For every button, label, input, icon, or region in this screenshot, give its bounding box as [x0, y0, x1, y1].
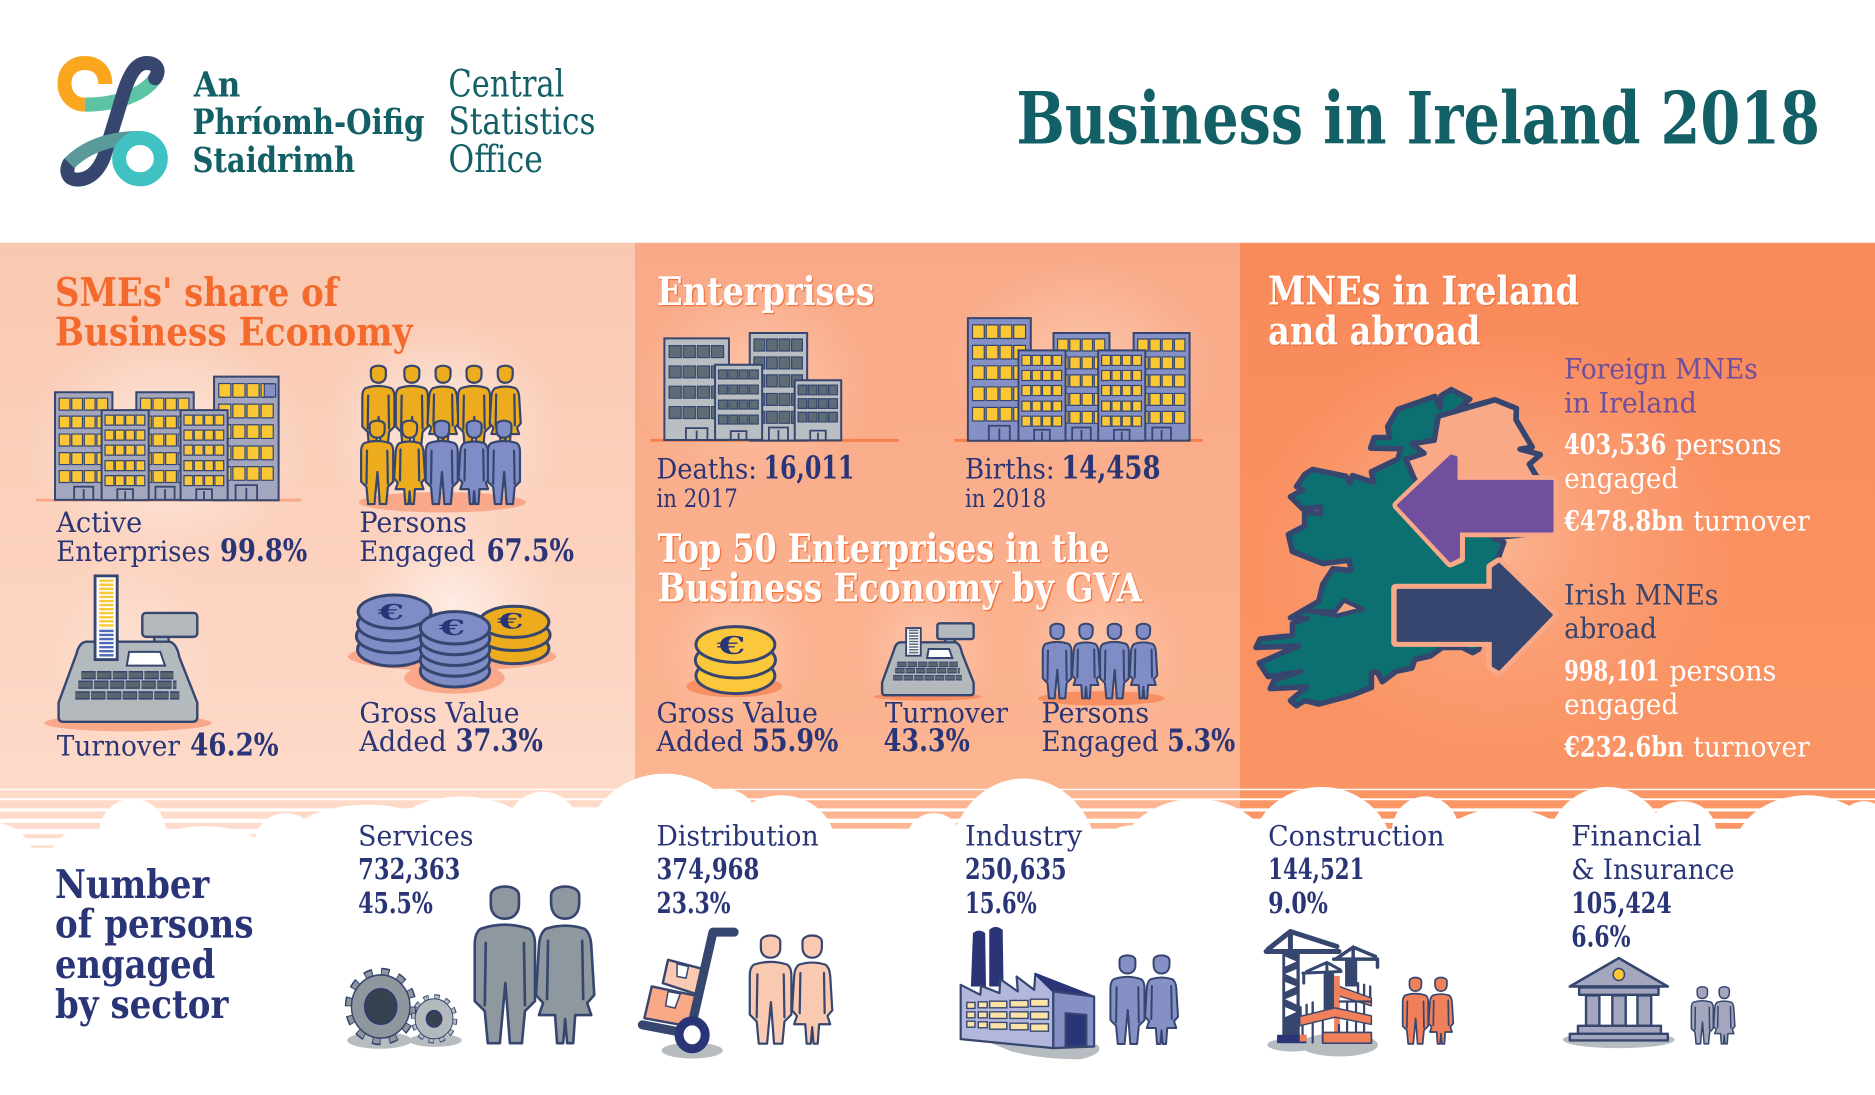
heading: number of persons engaged by sector	[55, 862, 254, 1028]
sector: financial and insurance	[1563, 819, 1735, 1048]
text: Irish MNEs	[1563, 578, 1810, 763]
icon: factory	[961, 927, 1099, 1059]
label: persons engaged share: Engaged	[1042, 725, 1159, 758]
sector: construction	[1266, 819, 1453, 1056]
icon: two persons blue	[1110, 955, 1178, 1044]
sector: distribution	[642, 819, 832, 1058]
sector: services	[347, 819, 594, 1049]
label: GVA share: 55.9%	[752, 723, 838, 759]
arrow: Irish MNEs abroad	[1396, 562, 1554, 672]
heading: Business Economy	[55, 310, 413, 356]
label: gross value added: Added	[358, 725, 447, 758]
label: turnover: Turnover	[57, 730, 180, 763]
label: persons engaged share: 5.3%	[1167, 723, 1235, 759]
label: active enterprises: 99.8%	[220, 533, 307, 569]
text: Irish MNEs: turnover	[1693, 730, 1810, 763]
icon: bank building	[1563, 958, 1675, 1048]
label: persons engaged	[359, 506, 574, 569]
label: deaths: in 2017	[656, 484, 738, 513]
heading: SMEs' share of	[55, 270, 341, 316]
text	[1571, 819, 1735, 953]
label: births	[965, 449, 1161, 513]
arrow: foreign MNEs into Ireland	[1397, 454, 1554, 563]
heading: number of persons engaged by sector: engaged	[55, 942, 215, 988]
text: 105,424	[1571, 886, 1672, 920]
map: Northern Ireland	[1406, 400, 1541, 516]
text: 45.5%	[358, 886, 433, 920]
text: Irish MNEs: persons	[1669, 654, 1776, 687]
label: persons engaged share: Persons	[1042, 696, 1149, 729]
heading: MNEs in Ireland	[1268, 268, 1579, 314]
text: Irish MNEs: abroad	[1564, 612, 1657, 645]
text: foreign MNEs: €478.8bn	[1563, 504, 1684, 537]
heading: number of persons engaged by sector: Number	[55, 862, 210, 908]
label: turnover share: Turnover	[885, 696, 1009, 729]
icon: coin stacks: €	[376, 600, 404, 625]
icon: persons engaged group	[359, 366, 526, 512]
map of Ireland with arrows	[1256, 390, 1554, 706]
icon: two persons peach	[750, 936, 832, 1044]
heading: top 50 enterprises	[658, 526, 1143, 611]
organisation name in English: Office	[448, 138, 543, 181]
label: births: in 2018	[965, 484, 1046, 513]
organisation name in Irish: An	[193, 64, 240, 105]
label: turnover share: 43.3%	[884, 723, 970, 759]
header: logo and title	[64, 62, 1820, 181]
text	[656, 819, 819, 920]
text: Distribution	[656, 819, 819, 852]
text	[965, 819, 1082, 920]
organisation name in Irish: Phríomh-Oifig	[193, 102, 425, 143]
heading: number of persons engaged by sector: by sector	[55, 982, 229, 1028]
label: deaths: Deaths:	[656, 452, 757, 485]
label: persons engaged: Persons	[359, 506, 467, 539]
text: 6.6%	[1571, 919, 1631, 953]
text: Irish MNEs: 998,101	[1564, 654, 1660, 687]
text: foreign MNEs: engaged	[1564, 462, 1678, 495]
icon: four persons	[1038, 624, 1165, 706]
heading: top 50 enterprises: Business Economy by GVA	[658, 565, 1143, 611]
label: active enterprises: Enterprises	[56, 535, 210, 568]
label: turnover: 46.2%	[190, 728, 279, 764]
label: persons engaged share	[1042, 696, 1235, 759]
label: turnover share	[884, 696, 1009, 759]
text: & Insurance	[1571, 853, 1735, 886]
icon: coin stacks	[348, 595, 556, 694]
text: foreign MNEs	[1563, 353, 1810, 537]
text: Irish MNEs: engaged	[1564, 688, 1678, 721]
sector: industry	[961, 819, 1178, 1059]
heading: and abroad	[1268, 308, 1480, 354]
icon: blue buildings (births)	[954, 318, 1203, 442]
label: GVA share: Gross Value	[656, 696, 818, 729]
organisation name in Irish: Staidrimh	[193, 140, 355, 181]
icon: yellow coin stack	[686, 627, 782, 697]
label: gross value added: 37.3%	[456, 723, 543, 759]
icon: two persons orange	[1403, 977, 1453, 1044]
label: GVA share: Added	[656, 725, 744, 758]
heading	[55, 270, 413, 356]
icon: two persons grey	[475, 887, 594, 1043]
label: births: 14,458	[1061, 449, 1161, 486]
icon: buildings	[36, 377, 301, 502]
heading: number of persons engaged by sector: of persons	[55, 902, 254, 948]
label: GVA share	[656, 696, 838, 759]
icon: gears	[347, 974, 462, 1049]
heading: top 50 enterprises: Top 50 Enterprises in the	[658, 526, 1110, 572]
icon: cash register	[44, 576, 212, 731]
organisation name in Irish	[193, 64, 425, 181]
panel: enterprises and top 50	[634, 243, 1240, 855]
label: active enterprises: Active	[55, 506, 142, 539]
text: foreign MNEs: turnover	[1693, 504, 1810, 537]
text: 15.6%	[965, 886, 1037, 920]
heading: enterprises: Enterprises	[657, 269, 875, 315]
heading	[1268, 268, 1579, 354]
text: 23.3%	[656, 886, 731, 920]
icon: coin stacks: €	[496, 609, 524, 634]
text: foreign MNEs: in Ireland	[1564, 387, 1697, 420]
text: Financial	[1571, 819, 1702, 852]
text: foreign MNEs: Foreign MNEs	[1564, 353, 1758, 386]
text: 732,363	[358, 852, 460, 886]
icon: grey buildings (deaths)	[651, 333, 899, 442]
label: gross value added	[358, 696, 543, 759]
label: turnover	[57, 728, 279, 764]
icon: hand truck with boxes	[642, 932, 734, 1058]
logo: CSO ribbon mark	[64, 63, 161, 180]
icon: cranes and building	[1266, 931, 1378, 1056]
label: persons engaged: 67.5%	[487, 533, 574, 569]
text: Irish MNEs: €232.6bn	[1563, 730, 1684, 763]
map: island of Ireland	[1256, 390, 1541, 706]
label: births: Births:	[965, 452, 1055, 485]
text	[1268, 819, 1445, 920]
cloud band with stripes	[0, 774, 1875, 1095]
panel: SMEs' share of business economy	[0, 243, 635, 855]
organisation name in English: Central	[448, 62, 564, 105]
panel: MNEs in Ireland and abroad	[1240, 243, 1875, 855]
text: foreign MNEs: persons	[1675, 428, 1782, 461]
text: foreign MNEs: 403,536	[1564, 428, 1666, 461]
organisation name in English	[448, 62, 596, 181]
label: deaths	[656, 449, 854, 513]
text: Construction	[1268, 819, 1445, 852]
label: gross value added: Gross Value	[359, 696, 520, 729]
icon: two persons lilac	[1691, 987, 1735, 1044]
label: active enterprises	[55, 506, 307, 569]
text: Irish MNEs: Irish MNEs	[1564, 578, 1718, 611]
text: Industry	[965, 819, 1082, 852]
icon: yellow coin stack: €	[715, 632, 746, 660]
label: persons engaged: Engaged	[359, 535, 475, 568]
text	[358, 819, 474, 920]
text: Services	[358, 819, 474, 852]
text: 250,635	[965, 852, 1067, 886]
label: deaths: 16,011	[764, 449, 854, 486]
text: 9.0%	[1268, 886, 1328, 920]
icon: coin stacks: €	[437, 616, 465, 641]
icon: small cash register	[874, 623, 982, 701]
organisation name in English: Statistics	[448, 100, 596, 143]
text: 144,521	[1268, 852, 1364, 886]
text: 374,968	[656, 852, 759, 886]
